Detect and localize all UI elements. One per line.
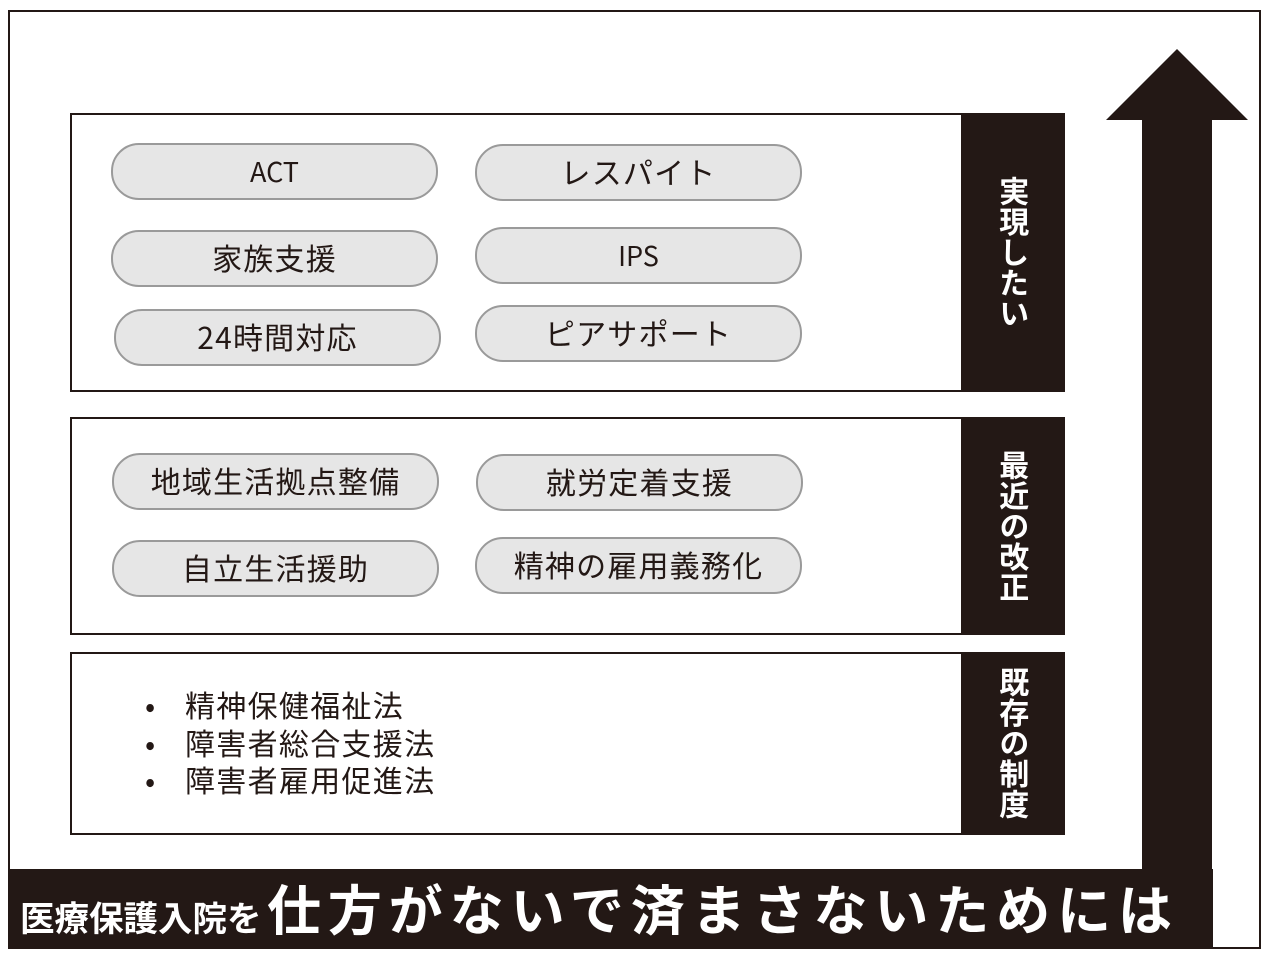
pill: 24時間対応: 24時間対応 [197, 314, 358, 358]
panel: 既存の制度 [70, 652, 1065, 835]
pill: IPS [475, 227, 802, 284]
pill: レスパイト: レスパイト [560, 149, 716, 193]
title banner [9, 869, 1213, 948]
title: small part: 医療保護入院を [20, 891, 262, 941]
list: existing laws: 障害者雇用促進法 [185, 757, 435, 801]
pill: 精神の雇用義務化: 精神の雇用義務化 [514, 542, 763, 586]
label: 実現したい: 実現したい [992, 176, 1036, 329]
pill: レスパイト [475, 144, 802, 201]
label: 最近の改正 [961, 417, 1065, 635]
pill: 家族支援 [111, 230, 438, 287]
pill: 精神の雇用義務化 [475, 537, 802, 594]
pill: IPS: IPS [618, 235, 659, 274]
label: 既存の制度: 既存の制度 [992, 667, 1036, 820]
label: 実現したい [961, 113, 1065, 392]
label: 最近の改正: 最近の改正 [992, 450, 1036, 602]
pill: ACT [111, 143, 438, 200]
list: existing laws: • [145, 682, 155, 726]
pill: ピアサポート [475, 305, 802, 362]
pill: 地域生活拠点整備 [112, 453, 439, 510]
label: 既存の制度 [961, 652, 1065, 835]
pill: 地域生活拠点整備: 地域生活拠点整備 [151, 458, 400, 502]
pill: 自立生活援助 [112, 540, 439, 597]
list: existing laws: • [145, 757, 155, 801]
pill: 就労定着支援: 就労定着支援 [546, 459, 733, 503]
pill: 自立生活援助: 自立生活援助 [182, 545, 369, 589]
arrow: upward progress [1106, 49, 1248, 869]
list: existing laws [145, 682, 435, 801]
title: large part: 仕方がないで済まさないためには [267, 867, 1179, 946]
pill: ACT: ACT [250, 151, 299, 190]
list: existing laws: 障害者総合支援法 [185, 720, 435, 764]
pill: 家族支援: 家族支援 [212, 235, 337, 279]
pill: 24時間対応 [114, 309, 441, 366]
list: existing laws: 精神保健福祉法 [185, 682, 404, 726]
list: existing laws: • [145, 720, 155, 764]
pill: 就労定着支援 [476, 454, 803, 511]
pill: ピアサポート: ピアサポート [545, 310, 732, 354]
panel: 実現したい [70, 113, 1065, 392]
panel: 最近の改正 [70, 417, 1065, 635]
